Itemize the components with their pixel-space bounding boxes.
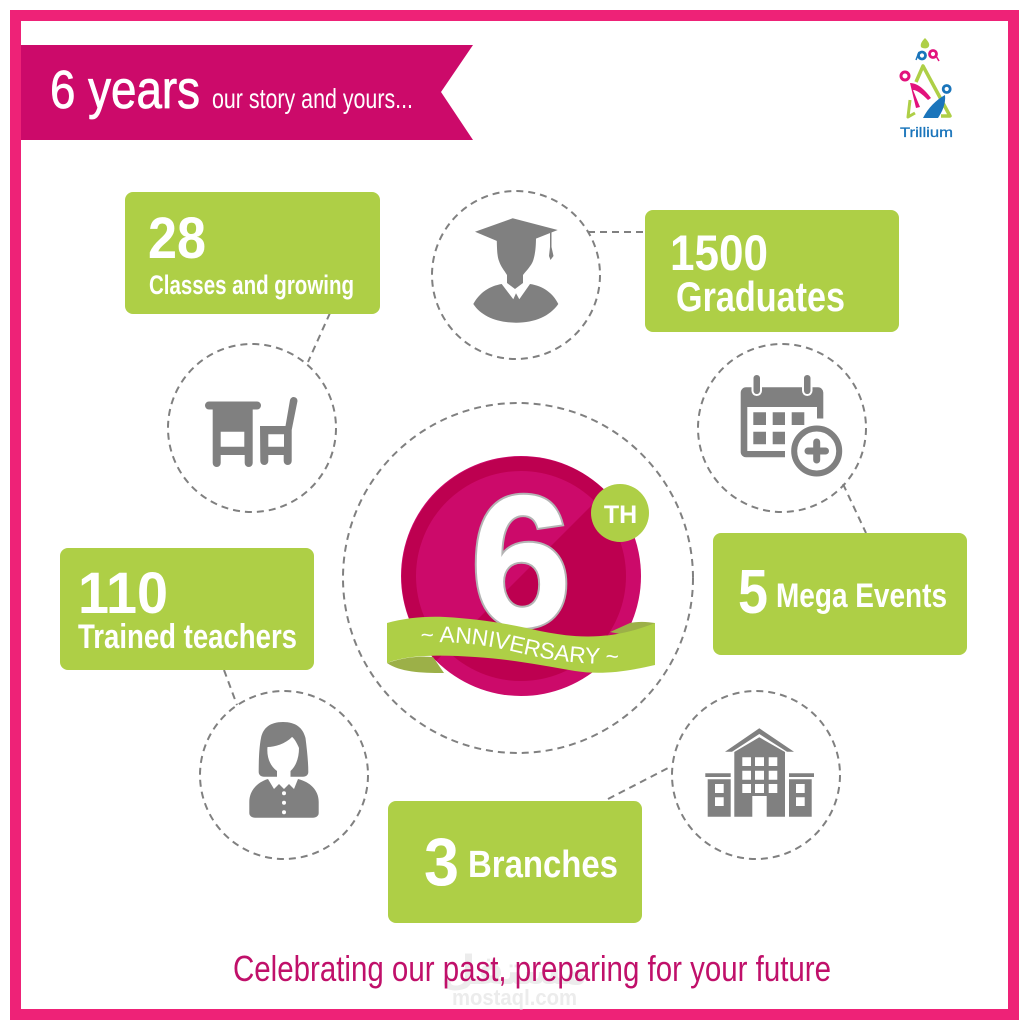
banner subtitle: our story and yours... bbox=[212, 83, 413, 114]
number 1500: 1500 bbox=[670, 225, 768, 281]
watermark: mostaql.com bbox=[452, 985, 577, 1010]
label graduates: Graduates bbox=[676, 273, 845, 320]
anniversary badge bbox=[387, 456, 655, 696]
panel: branches bbox=[388, 801, 642, 923]
ribbon text: ~ ANNIVERSARY ~ bbox=[422, 626, 618, 664]
label teachers: Trained teachers bbox=[78, 618, 297, 656]
icon: calendar with plus bbox=[698, 344, 866, 512]
connector: teachers bbox=[224, 670, 237, 705]
number 28: 28 bbox=[148, 206, 206, 271]
big number 6: 6 bbox=[470, 456, 572, 666]
panel: events bbox=[713, 533, 967, 655]
footer tagline: Celebrating our past, preparing for your future bbox=[233, 948, 831, 989]
panel: classes bbox=[125, 192, 380, 314]
header banner bbox=[21, 45, 473, 140]
connector: classes bbox=[308, 313, 330, 362]
watermark: مستقل bbox=[441, 948, 587, 994]
number 110: 110 bbox=[78, 561, 168, 626]
icon: graduate bbox=[432, 191, 600, 359]
icon: teacher bbox=[200, 691, 368, 859]
icon: desk and chair bbox=[168, 344, 336, 512]
label events: Mega Events bbox=[776, 577, 947, 615]
label branches: Branches bbox=[468, 844, 618, 886]
connector: branches bbox=[608, 766, 672, 799]
logo: Trillium: Trillium bbox=[900, 124, 953, 140]
logo: Trillium bbox=[900, 38, 953, 140]
label classes: Classes and growing bbox=[149, 270, 354, 300]
number 3: 3 bbox=[424, 824, 459, 900]
icon: school building bbox=[672, 691, 840, 859]
number 5: 5 bbox=[738, 558, 768, 627]
connector: graduates bbox=[588, 231, 645, 233]
ribbon bbox=[387, 616, 655, 673]
TH badge bbox=[591, 484, 649, 542]
TH badge: TH bbox=[604, 501, 637, 529]
panel: teachers bbox=[60, 548, 314, 670]
panel: graduates bbox=[645, 210, 899, 332]
connector: events bbox=[843, 484, 866, 533]
banner title: 6 years bbox=[50, 60, 200, 120]
center dashed ring bbox=[343, 403, 693, 753]
